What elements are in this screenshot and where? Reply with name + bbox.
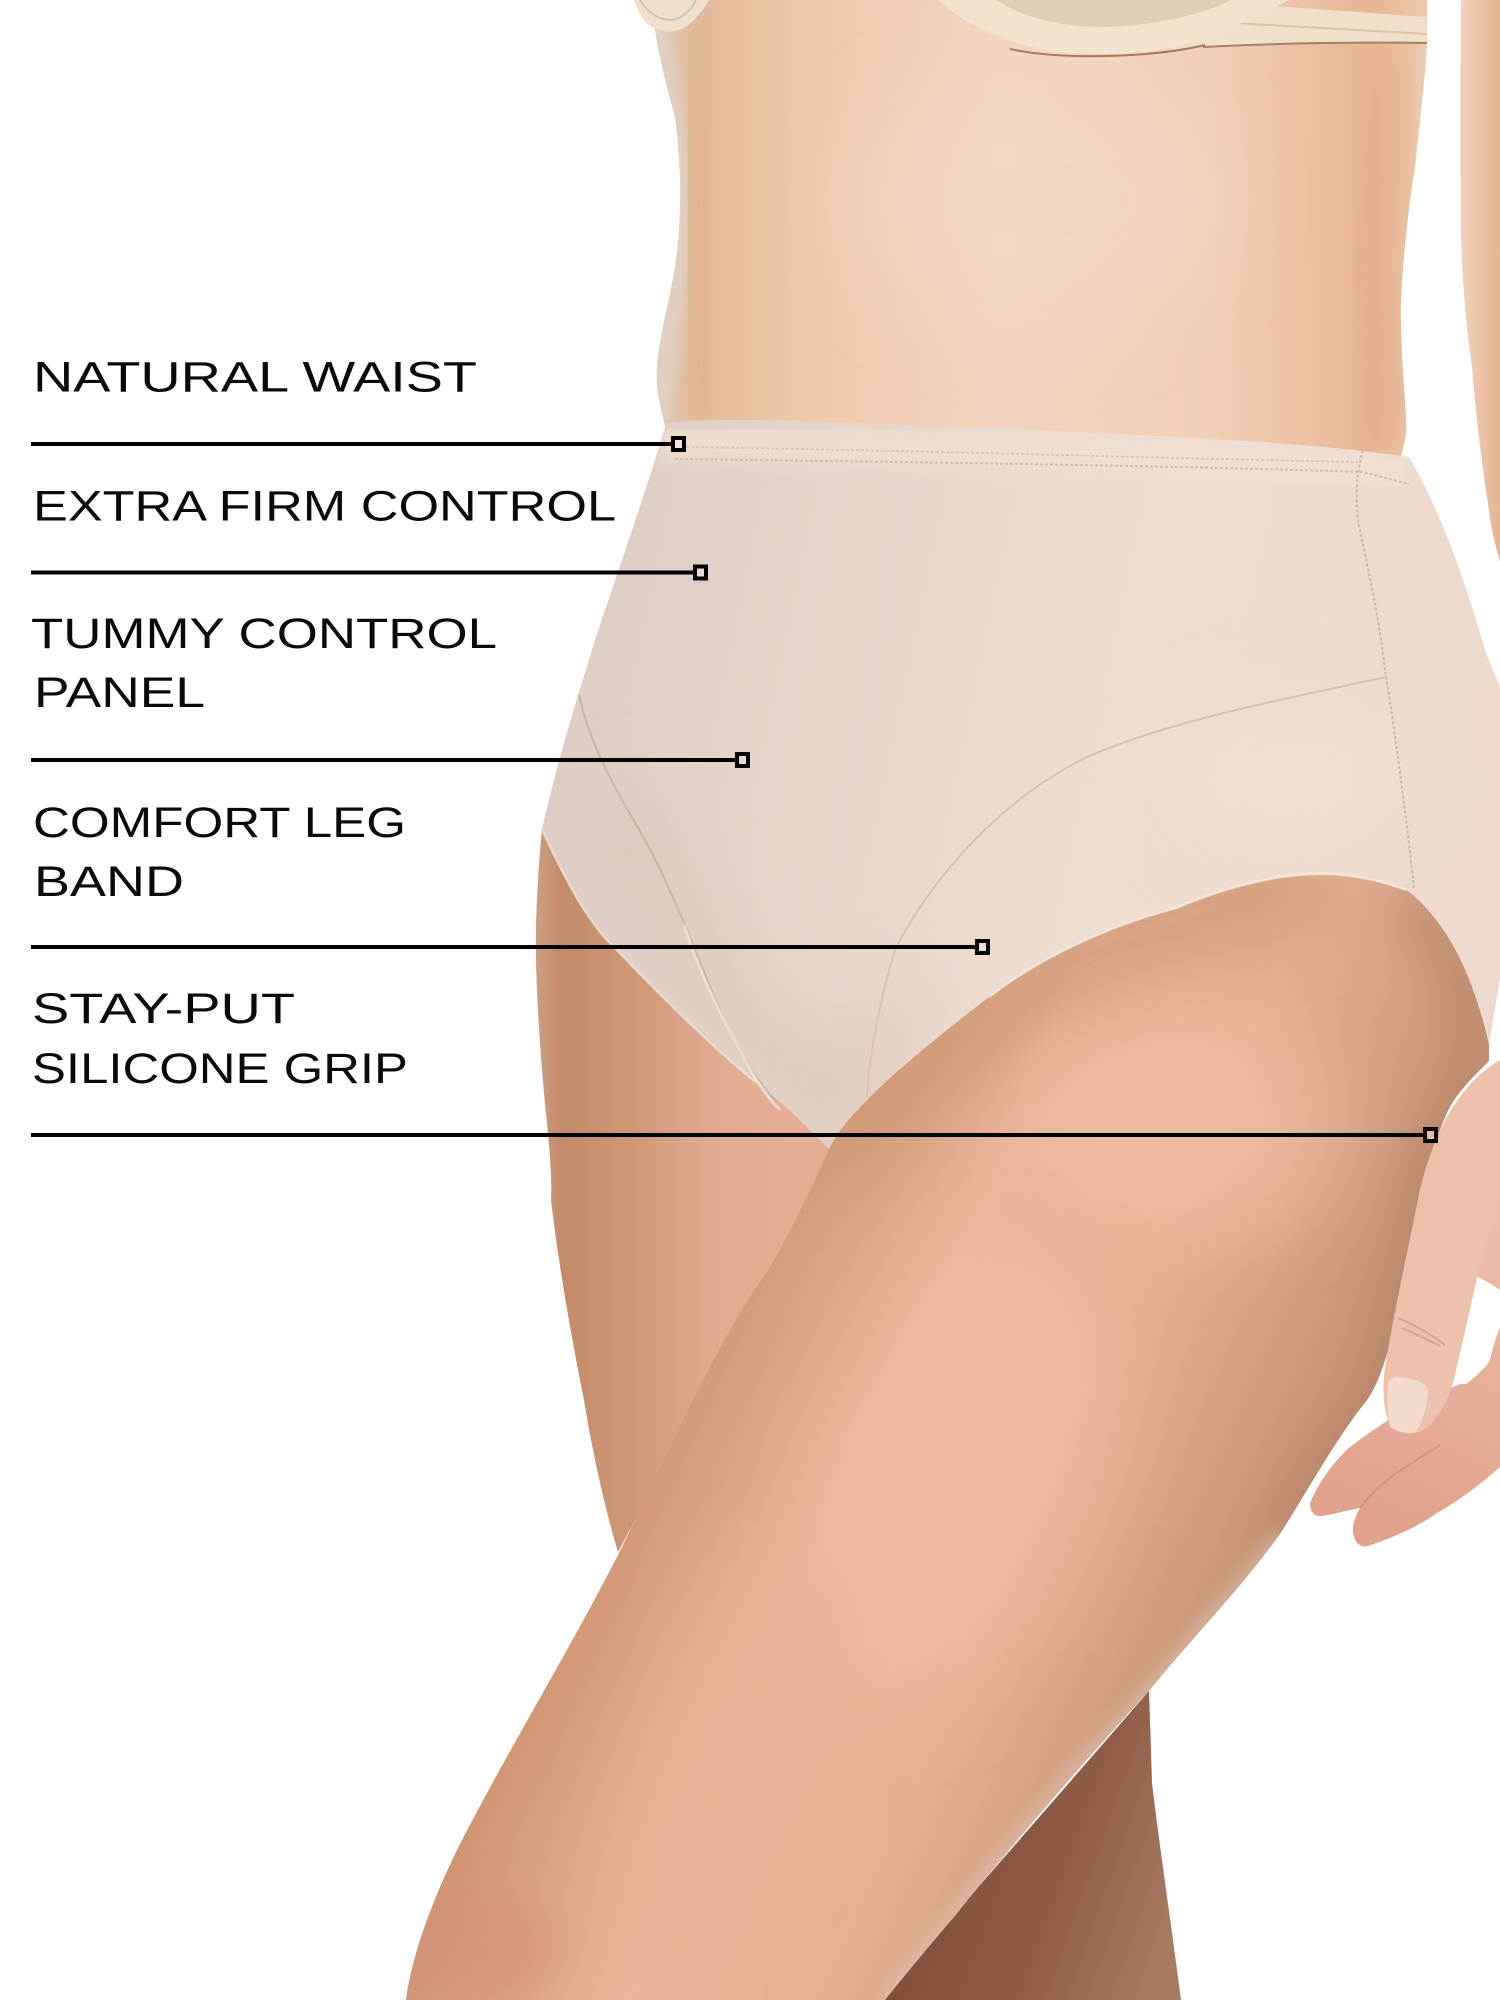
bra band — [1170, 0, 1427, 52]
leader line — [31, 1133, 1425, 1137]
back leg — [536, 829, 860, 1552]
tummy panel seam — [867, 677, 1386, 1097]
thumb nail — [1387, 1377, 1428, 1433]
right cup underwire — [939, 0, 1289, 54]
photo: model wearing high-waist shaping brief — [400, 0, 1500, 2000]
label: COMFORT LEG — [33, 800, 406, 847]
brief hem highlight — [542, 829, 757, 1083]
callout: extra firm control — [31, 484, 706, 578]
knuckle creases — [1398, 1318, 1445, 1346]
bra band and cups — [634, 0, 1427, 56]
callout: natural waist — [31, 354, 684, 450]
side seam — [1357, 450, 1414, 890]
leader line — [31, 758, 737, 762]
waistband brighter strip — [660, 430, 856, 460]
leader line — [31, 945, 977, 949]
label: EXTRA FIRM CONTROL — [33, 484, 616, 530]
callout: comfort leg band: BAND — [34, 859, 184, 906]
comfort leg seam — [579, 694, 776, 1101]
marker — [673, 438, 684, 450]
waistband stitching — [686, 447, 1358, 462]
left cup edge — [634, 0, 709, 32]
white gap between thumb and fingers — [1453, 1277, 1500, 1384]
label: STAY-PUT — [32, 986, 295, 1033]
thigh — [400, 860, 1500, 2000]
thumb — [1383, 1060, 1500, 1434]
marker — [695, 566, 706, 578]
callout: tummy control panel: PANEL — [34, 670, 205, 717]
hand palm and fingers — [1310, 1060, 1500, 1546]
finger separation — [1360, 1445, 1440, 1508]
torso — [640, 0, 1440, 470]
callout: stay-put silicone grip — [31, 986, 1436, 1141]
marker — [1425, 1129, 1436, 1141]
label: NATURAL WAIST — [33, 354, 477, 402]
lower calf behind thigh — [880, 1691, 1181, 2000]
leader line — [31, 442, 673, 446]
arm at upper right — [1460, 0, 1500, 562]
hand resting on thigh — [1310, 1060, 1500, 1546]
marker — [737, 754, 748, 766]
marker — [977, 941, 988, 953]
leader line — [31, 570, 695, 574]
callout: stay-put silicone grip: SILICONE GRIP — [32, 1046, 408, 1093]
label: TUMMY CONTROL — [31, 611, 497, 658]
high-waist brief — [530, 410, 1500, 1170]
callout: comfort leg band — [31, 800, 988, 953]
callout: tummy control panel — [31, 611, 748, 766]
